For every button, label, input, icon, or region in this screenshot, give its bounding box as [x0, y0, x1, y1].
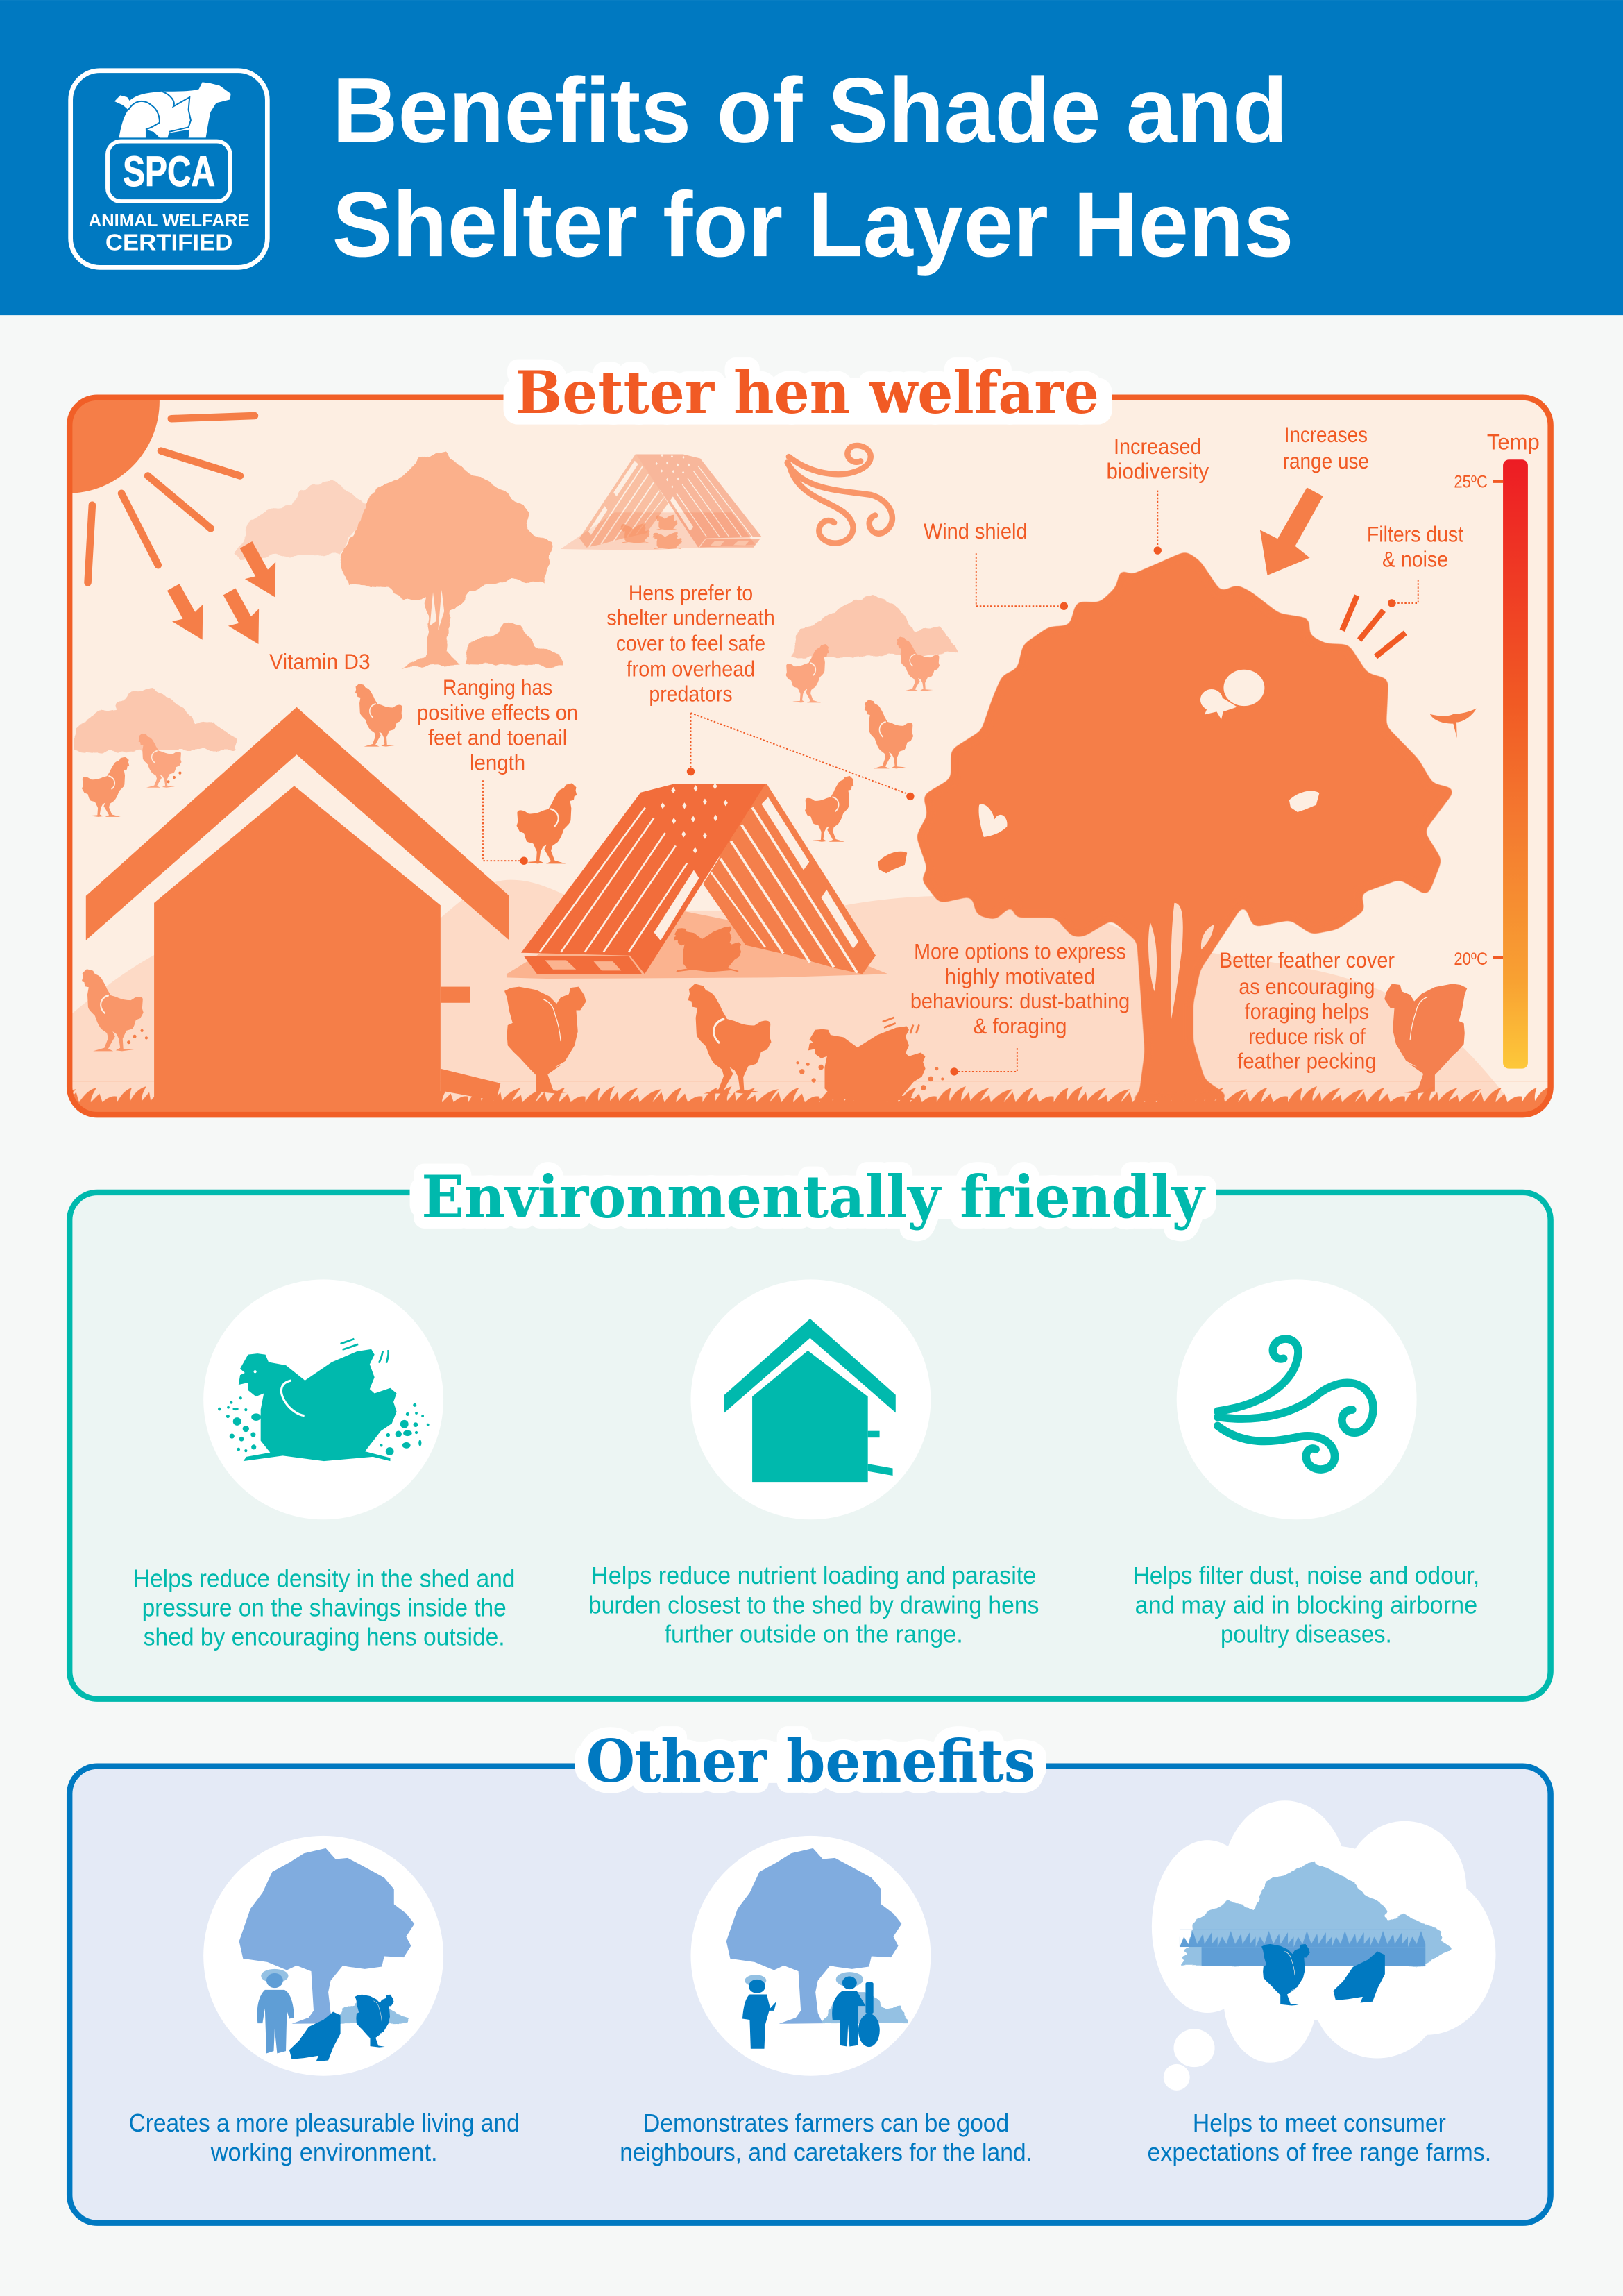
text: feather cover	[1219, 947, 1395, 1074]
scenery left: bushes and small tree	[73, 453, 561, 752]
middle bush	[791, 595, 958, 658]
pallet shade	[507, 907, 888, 979]
text: reduce density: pressure on the shavings inside the	[142, 1594, 507, 1621]
text: reduce density	[133, 1564, 515, 1651]
title	[332, 60, 1293, 276]
text: feather cover: foraging helps	[1245, 999, 1369, 1024]
text: hens prefer: from overhead	[627, 656, 755, 681]
hens near far pallet	[620, 515, 682, 549]
text: filters dust	[1367, 521, 1463, 571]
text: biodiversity	[1106, 434, 1209, 484]
text: feather cover: Better feather cover	[1219, 947, 1395, 972]
peacock	[1200, 670, 1264, 719]
logo: SPCA animal welfare certified: CERTIFIED	[105, 230, 232, 256]
text: more options: More options to express	[914, 939, 1126, 964]
title: Benefits of Shade and	[332, 60, 1288, 162]
text: reduce density: shed by encouraging hens outside.	[144, 1623, 505, 1651]
shed	[86, 707, 509, 1113]
text: good neighbours	[620, 2109, 1033, 2166]
text: temp scale	[1454, 430, 1540, 969]
heading: environmentally friendly: Environmentally friendly	[421, 1163, 1207, 1231]
hens in scene	[82, 636, 1467, 1102]
temperature ticks	[1493, 482, 1503, 957]
text: range use	[1283, 422, 1369, 473]
vitamin arrows	[167, 541, 276, 644]
icon: wind	[1177, 1279, 1417, 1519]
text: more options: highly motivated	[944, 963, 1096, 988]
text: filters dust: Filters dust	[1367, 521, 1463, 546]
text: filters dust: & noise	[1382, 546, 1448, 571]
trunk slits	[1148, 903, 1214, 1020]
heading: other benefits: Other benefits	[586, 1727, 1035, 1796]
text: hens prefer: Hens prefer to	[629, 580, 753, 605]
text: ranging: positive effects on	[417, 700, 578, 725]
butterfly	[979, 804, 1007, 837]
text: consumer expectations: expectations of free range farms.	[1148, 2138, 1491, 2166]
range arrow	[1260, 487, 1323, 575]
text: range use: Increases	[1284, 422, 1368, 447]
wind icon	[788, 446, 892, 543]
text: nutrient loading: Helps reduce nutrient loading and parasite	[591, 1562, 1036, 1589]
panel: better hen welfare	[67, 358, 1554, 1117]
text: more options	[910, 939, 1130, 1038]
temperature bar	[1503, 459, 1528, 1069]
text: range use: range use	[1283, 448, 1369, 473]
hen under pallet	[674, 927, 741, 972]
heading: better hen welfare: Better hen welfare	[515, 358, 1099, 427]
sun	[72, 400, 160, 493]
text: reduce density: Helps reduce density in the shed and	[133, 1564, 515, 1592]
text: ranging: Ranging has	[443, 675, 552, 700]
text: consumer expectations: Helps to meet consumer	[1193, 2109, 1446, 2137]
icon: tree with farmer and hens	[203, 1836, 443, 2076]
logo: SPCA animal welfare certified: SPCA	[123, 148, 215, 195]
icon: tree with two farmers	[690, 1836, 931, 2076]
text: filter dust: poultry diseases.	[1221, 1620, 1392, 1648]
bee	[1289, 791, 1319, 812]
panel background and scene	[72, 400, 1547, 1112]
text: hens prefer: shelter underneath	[606, 605, 775, 630]
text: pleasurable environment: Creates a more pleasurable living and	[129, 2109, 520, 2137]
text: nutrient loading: burden closest to the shed by drawing hens	[588, 1591, 1039, 1619]
main pallet shelter	[521, 783, 876, 974]
panel: environmentally friendly	[69, 1163, 1551, 1699]
text: good neighbours: neighbours, and caretakers for the land.	[620, 2138, 1033, 2166]
text: biodiversity: Increased	[1114, 434, 1202, 459]
leader lines	[483, 491, 1418, 1076]
text: ranging	[417, 675, 578, 775]
text: temp scale: Temp	[1487, 430, 1540, 455]
hills	[67, 880, 1507, 1120]
text: feather cover: as encouraging	[1239, 974, 1375, 999]
text: vitamin D3: Vitamin D3	[269, 649, 371, 674]
text: hens prefer	[606, 580, 775, 706]
text: hens prefer: predators	[649, 681, 733, 706]
sun rays	[88, 416, 255, 582]
icon: thought cloud	[1152, 1800, 1496, 2091]
text: filter dust: Helps filter dust, noise and odour,	[1132, 1562, 1479, 1589]
dust and motion marks	[127, 772, 944, 1090]
grass strip	[67, 1082, 1553, 1118]
bee orange	[878, 852, 907, 873]
text: temp scale: 20ºC	[1454, 949, 1488, 969]
text: nutrient loading: further outside on the range.	[665, 1620, 963, 1648]
text: feather cover: feather pecking	[1237, 1049, 1377, 1074]
text: filter dust	[1132, 1562, 1479, 1648]
title: Shelter for Layer Hens	[332, 174, 1293, 276]
text: more options: & foraging	[974, 1013, 1067, 1038]
logo: SPCA animal welfare certified: ANIMAL WELFARE	[89, 211, 250, 230]
icon: shed	[690, 1279, 931, 1519]
text: feather cover: reduce risk of	[1248, 1024, 1366, 1049]
header banner	[0, 0, 1623, 315]
far pallet shade	[561, 512, 755, 550]
text: filter dust: and may aid in blocking airborne	[1135, 1591, 1477, 1619]
logo: SPCA animal welfare certified	[71, 71, 267, 267]
icon: dust bathing hen	[203, 1279, 443, 1519]
text: pleasurable environment	[129, 2109, 520, 2166]
text: good neighbours: Demonstrates farmers can be good	[643, 2109, 1009, 2137]
dragonfly	[1430, 709, 1477, 738]
far pallet shelter	[579, 454, 762, 548]
text: pleasurable environment: working environment.	[210, 2138, 438, 2166]
panel border	[69, 398, 1551, 1115]
main tree	[878, 552, 1477, 1101]
text: ranging: feet and toenail	[428, 725, 567, 750]
text: temp scale: 25ºC	[1454, 472, 1488, 491]
text: more options: behaviours: dust-bathing	[910, 988, 1130, 1013]
panel: other benefits	[69, 1727, 1551, 2223]
text: nutrient loading	[588, 1562, 1039, 1648]
text: hens prefer: cover to feel safe	[616, 631, 765, 656]
dust lines	[1342, 596, 1405, 657]
text: biodiversity: biodiversity	[1106, 459, 1209, 484]
text: consumer expectations	[1148, 2109, 1491, 2166]
text: ranging: length	[470, 750, 525, 775]
text: wind shield: Wind shield	[924, 518, 1028, 543]
